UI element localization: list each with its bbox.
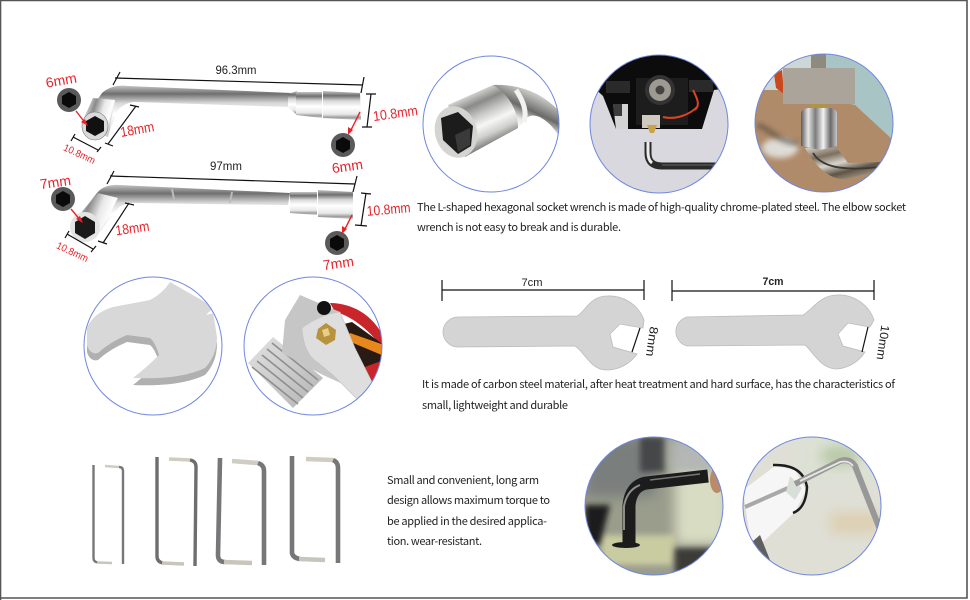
dimension labels 7mm wrench: 10.8mm	[54, 241, 90, 265]
description: spanner	[422, 376, 895, 413]
description: allen keys: design allows maximum torque to	[387, 492, 550, 508]
description: socket wrench: The L-shaped hexagonal socket wrench is made of high-quality chrome-plated steel. The elbow socket	[417, 199, 906, 215]
photo: socket closeup	[423, 56, 560, 192]
spanner 8mm: 8mm	[643, 326, 661, 357]
dimension labels 7mm wrench: 97mm	[210, 161, 242, 173]
spanner 10mm: 10mm	[874, 324, 892, 361]
description: socket wrench	[417, 199, 906, 235]
dimension labels 6mm wrench: 96.3mm	[216, 65, 256, 77]
description: allen keys: tion. wear-resistant.	[387, 533, 482, 549]
description: socket wrench: wrench is not easy to break and is durable.	[417, 219, 621, 235]
panel: allen keys	[94, 456, 338, 566]
spanner 10mm	[672, 276, 892, 369]
spanner 8mm: 7cm	[522, 277, 542, 289]
spanner 10mm: 7cm	[762, 276, 784, 288]
icon: 6mm hex left	[57, 88, 88, 126]
icon: 7mm hex left	[51, 187, 83, 223]
allen key pair 4	[292, 456, 338, 563]
wrench 6mm	[82, 86, 361, 140]
photo: allen key in workpiece	[585, 437, 730, 575]
dimension labels 7mm wrench: 18mm	[114, 218, 150, 238]
photo: spanner closeup	[84, 277, 224, 415]
description: allen keys: be applied in the desired applica-	[387, 513, 547, 529]
photo: spanner on hotend	[244, 277, 384, 415]
dimension labels 6mm wrench	[44, 65, 419, 176]
allen key pair 2	[157, 457, 196, 566]
dimension labels 6mm wrench: 10.8mm	[61, 143, 97, 167]
allen key pair 3	[218, 458, 264, 565]
photo: heater block with socket wrench	[752, 52, 893, 195]
dimension labels 6mm wrench: 6mm	[331, 156, 364, 176]
dimension labels 7mm wrench	[39, 161, 411, 273]
dimension labels 7mm wrench: 7mm	[39, 172, 72, 192]
panel: socket wrench dimensions	[39, 65, 419, 273]
description: allen keys	[387, 472, 550, 549]
description: spanner: It is made of carbon steel material, after heat treatment and hard surface, has the characteristics of	[422, 376, 895, 392]
icon: 7mm hex right	[325, 215, 352, 255]
dimension labels 6mm wrench: 10.8mm	[372, 102, 419, 124]
panel: open spanners with dimensions	[442, 276, 892, 370]
spanner 8mm	[442, 277, 661, 370]
description: allen keys: Small and convenient, long arm	[387, 472, 539, 488]
dimension labels 6mm wrench: 18mm	[119, 118, 155, 140]
wrench 7mm	[70, 185, 353, 242]
photo: allen key in bolt	[743, 437, 881, 575]
description: spanner: small, lightweight and durable	[422, 397, 568, 413]
dimension labels 7mm wrench: 7mm	[322, 253, 355, 273]
dimension labels 6mm wrench: 6mm	[44, 69, 78, 91]
dimension labels 7mm wrench: 10.8mm	[366, 199, 411, 219]
photo: printer nozzle with L key	[590, 50, 730, 193]
allen key pair 1	[94, 465, 123, 564]
icon: 6mm hex right	[331, 112, 360, 157]
